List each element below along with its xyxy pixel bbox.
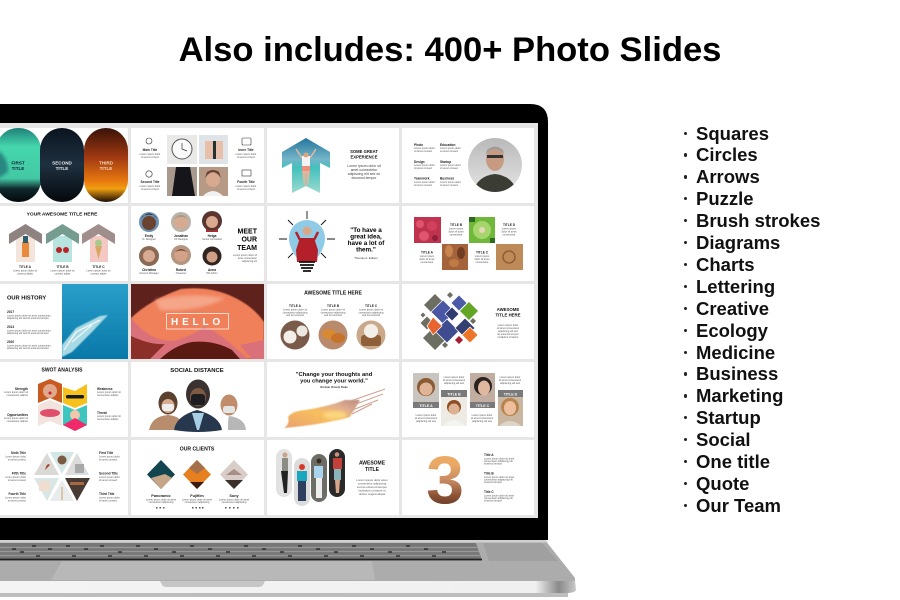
slide: four texture squares: consectetur [476,261,489,264]
slide: meet our team: Jonathan [174,234,188,238]
slide: four portraits: sit amet consectetur [443,379,465,382]
slide: swot analysis: consectetur adipisc [97,418,119,421]
slide: four texture squares: dolor sit amet [419,258,435,261]
slide: three circle photos: Lorem ipsum dolor sit [321,308,345,312]
slide: three circle photos: Lorem ipsum dolor sit [359,308,383,312]
slide: portrait with six topics: Education [440,143,455,147]
feature list [684,122,820,516]
feature list: Our Team [696,495,781,516]
slide: our clients: consectetur adipiscing [222,501,247,504]
slide: hexagon of triangles: Fourth Title [9,492,26,496]
slide: four texture squares: TITLE C [476,250,489,254]
slide: hexagon of triangles: sit amet consect [8,458,26,462]
slide: awesome title with people pills: AWESOME [359,460,386,466]
slide: diamond mosaic: TITLE HERE [495,312,521,318]
slide: number three: eiusmod tempor [484,462,502,466]
slide: idea quote with light bulb: have a lot of [348,240,385,247]
slide: swot analysis: Lorem ipsum dolor sit [97,391,121,394]
slide: three circle photos: consectetur adipiscing [359,312,384,314]
slide: some great experience: Lorem ipsum dolor sit [347,164,381,168]
slide: hello canyon photo: HELLO [171,317,224,328]
slide: hello canyon photo [131,284,264,359]
slide: four icons and photos: Lorem ipsum dolor [140,185,161,188]
slide: swot analysis: Weakness [97,387,113,391]
slide: swot analysis: consectetur adipisc [7,420,29,423]
slide: our history: 2017 [7,310,14,314]
slide: change your thoughts quote: "Change your thoughts and [296,372,373,378]
slide: our history: adipiscing elit sed do eiusmod tempor [7,347,49,350]
slide: four icons and photos: sit amet consect [237,156,255,159]
slide: four icons and photos: Second Title [141,180,160,184]
slide: four portraits: TITLE C [476,404,490,408]
slide: meet our team: TEAM [237,245,257,252]
slide: meet our team: Christina [142,268,156,272]
slide: hexagon of triangles: Lorem ipsum dolor [99,456,120,458]
laptop mockup with slide grid [0,104,576,597]
slide: portrait with six topics [402,128,534,203]
slide: four icons and photos [131,128,264,203]
slide: our clients: consectetur adipiscing [185,501,210,504]
slide: three circle photos: sed do eiusmod [286,314,304,317]
slide: three circle photos: AWESOME TITLE HERE [304,290,362,296]
trackpad [51,561,375,580]
slide: four icons and photos: Fourth Title [237,180,255,184]
slide: four texture squares: consectetur [503,234,516,236]
slide: meet our team: Emily [145,234,153,238]
feature list: Diagrams [696,232,780,253]
slide: some great experience: SOME GREAT [350,149,378,154]
slide: portrait with six topics: Lorem ipsum dolor [440,147,461,150]
slide: number three: Lorem ipsum dolor sit amet [484,458,514,460]
slide: four texture squares [402,206,534,281]
slide: idea quote with light bulb: "To have a [350,227,382,234]
slide: three circle photos: TITLE A [289,304,302,308]
slide: hexagon of triangles [0,440,128,515]
feature list: Business [696,363,778,384]
slide: swot analysis: consectetur adipisc [7,394,29,397]
slide: meet our team: adipiscing elit [242,260,257,263]
slide: awesome title with people pills: Lorem ipsum dolor amet [356,478,388,482]
slide: our clients: consectetur adipiscing [149,501,174,504]
slide: four texture squares: dolor sit amet [474,258,490,261]
slide: diamond mosaic: do eiusmod tempor [497,333,519,336]
slide: four portraits: Lorem ipsum dolor [472,414,493,417]
slide: hexagon of triangles: Fifth Title [12,472,26,476]
slide: portrait with six topics: Design [414,160,425,164]
slide: portrait with six topics: Startup [440,160,451,164]
slide: number three: consectetur adipiscing elit [484,460,513,463]
slide: awesome title with arrows: Lorem ipsum dolor sit [87,270,111,272]
slide: number three: eiusmod tempor [484,481,502,484]
slide: meet our team: Sr. Designer [142,238,156,241]
slide: diamond mosaic: Lorem ipsum dolor [498,324,519,327]
slide: four icons and photos: sit amet consect [141,188,159,191]
slide: awesome title with arrows: TITLE B [56,265,69,269]
feature list: Marketing [696,385,783,406]
slide: awesome title with people pills: TITLE [365,467,380,473]
slide: idea quote with light bulb: great idea, [350,234,382,240]
slide: three titles: TITLE [12,166,24,171]
feature list: Medicine [696,342,775,363]
slide: three titles: THIRD [99,160,114,166]
slide: three circle photos: consectetur adipiscing [283,312,308,314]
slide: portrait with six topics: sit amet consect [414,184,432,187]
slide: meet our team: Robert [176,268,187,272]
front notch [160,581,265,587]
slide: portrait with six topics: sit amet consect [414,167,432,170]
slide: awesome title with people pills: sed do eiusmod tempor [357,485,387,489]
slide: our history: adipiscing elit sed do eiusmod tempor [7,317,49,320]
slide: change your thoughts quote: you change your world." [300,378,368,384]
slide: some great experience: amet consectetur [351,168,378,172]
slide: four texture squares: TITLE D [503,223,516,227]
slide: four texture squares: consectetur [450,234,463,236]
slide: hexagon of triangles: Lorem ipsum dolor [5,456,26,458]
slide: four portraits: TITLE B [447,392,461,396]
slide: awesome title with arrows: consect adipis [17,272,34,276]
slide: hexagon of triangles: sit amet consect [99,500,117,502]
slide: four portraits: TITLE A [419,404,433,408]
slide: four texture squares: dolor sit amet [501,230,517,234]
slide: our history [0,284,128,359]
slide: portrait with six topics: Lorem ipsum dolor [440,181,461,184]
slide: our clients: Lorem ipsum dolor sit amet [182,498,212,502]
slide: four portraits: sit amet consectetur [471,417,493,420]
slide: three circle photos: TITLE B [327,304,340,308]
slide: four portraits: Lorem ipsum dolor [500,376,521,379]
title: Also includes: 400+ Photo Slides [179,31,721,69]
slide: social distance: SOCIAL DISTANCE [170,368,224,374]
slide: three circle photos: Lorem ipsum dolor sit [283,308,307,312]
slide: number three: Lorem ipsum dolor sit amet [484,476,514,479]
slide: portrait with six topics: Lorem ipsum dolor [440,164,461,167]
slide: four portraits: adipiscing elit sed [500,382,520,385]
slide: three titles: SECOND [52,160,73,166]
slide: awesome title with arrows [0,206,128,281]
slide: our history: adipiscing elit sed do eiusmod tempor [7,332,49,335]
slide: swot analysis: Lorem ipsum dolor sit [4,391,28,394]
slide: four texture squares: Lorem ipsum [420,255,434,258]
slide: our history: Lorem ipsum dolor sit amet consectetur [7,330,51,332]
feature list: Ecology [696,320,768,341]
slide: some great experience: eiusmod tempor [351,176,377,180]
slide: swot analysis [0,362,128,437]
slide: our clients: Lorem ipsum dolor sit amet [219,498,249,502]
slide: four portraits: adipiscing elit sed [472,420,492,423]
slide: three circle photos [267,284,399,359]
slide: meet our team: OUR [241,236,257,244]
slide: number three: consectetur adipiscing elit [484,478,513,482]
slide: awesome title with arrows: Lorem ipsum dolor sit [13,270,37,272]
slide: four icons and photos: Lorem ipsum dolor [236,153,257,156]
slide: hexagon of triangles: Lorem ipsum dolor [5,496,26,500]
slide: hexagon of triangles: Lorem ipsum dolor [99,476,120,479]
slide: meet our team: Senior Consultant [202,238,222,241]
slide: awesome title with people pills [267,440,399,515]
feature list: Social [696,429,750,450]
slide: four texture squares: dolor sit amet [448,230,464,234]
slide: three titles: TITLE [56,166,68,171]
slide: portrait with six topics: Photo [414,143,423,147]
speaker grille [483,543,558,561]
laptop lid bezel [0,104,548,540]
slide: diamond mosaic: sit amet consectetur [497,327,519,330]
slide: portrait with six topics: sit amet consect [440,150,458,153]
slide: number three: Title A [484,453,494,457]
slide: meet our team: HR Admin [206,272,218,275]
slide: portrait with six topics: Teamwork [414,176,430,180]
slide: number three: consectetur adipiscing elit [484,497,513,500]
slide: hexagon of triangles: sit amet consect [99,458,117,462]
slide: hexagon of triangles: Third Title [99,492,115,496]
slide: four texture squares: TITLE A [421,250,434,254]
slide: some great experience: adipiscing elit sed do [348,172,380,176]
slide: number three: 3 [426,442,464,518]
slide: awesome title with arrows: TITLE A [19,265,32,269]
slide: our clients: Fujifilm [190,494,204,498]
feature list: Puzzle [696,188,754,209]
slide: four icons and photos: Main Title [143,148,158,152]
slide: some great experience [267,128,399,203]
slide: four portraits: TITLE D [504,392,518,396]
slide: social distance [131,362,264,437]
slide: portrait with six topics: sit amet consect [414,150,432,153]
slide: three circle photos: sed do eiusmod [362,314,380,317]
feature list: One title [696,451,770,472]
slide: idea quote with light bulb: them." [356,246,376,254]
slide: swot analysis: Threat [97,411,108,415]
slide: portrait with six topics: sit amet consect [440,184,458,187]
slide: four icons and photos: Inner Title [238,148,254,152]
slide: four texture squares: Lorem ipsum [475,255,489,258]
feature list: Creative [696,298,769,319]
slide: three circle photos: TITLE C [365,304,378,308]
slide: meet our team [131,206,264,281]
slide: meet our team: Account Manager [139,272,159,275]
slide: our clients: Panoramic [151,494,171,498]
slide: meet our team: Anna [208,268,216,272]
laptop base [0,540,576,597]
slide: change your thoughts quote: Norman Vincent Peale [320,385,348,389]
slide: our clients: OUR CLIENTS [180,446,215,452]
slide: three titles [0,128,128,203]
slide: our history: 2020 [7,340,14,344]
slide: diamond mosaic [402,284,534,359]
slide: swot analysis: SWOT ANALYSIS [41,368,83,374]
slide: meet our team: amet consectetur [238,257,257,260]
slide: four portraits: adipiscing elit sed [444,382,464,385]
slide: hexagon of triangles: Sixth Title [11,451,26,455]
slide: four portraits: adipiscing elit sed [416,420,436,423]
slide: awesome title with arrows: Lorem ipsum dolor sit [51,270,75,272]
slide: hexagon of triangles: First Title [99,451,114,455]
slide: four icons and photos: Lorem ipsum dolor [236,185,257,188]
slide: four texture squares: consectetur [421,261,434,264]
slide: idea quote with light bulb [267,206,399,281]
slide: four portraits [402,362,534,437]
slide: our clients [131,440,264,515]
slide: swot analysis: Lorem ipsum dolor sit [97,415,121,418]
feature list: Squares [696,122,769,144]
slide: four icons and photos: Lorem ipsum dolor [140,153,161,156]
slide: three circle photos: sed do eiusmod [324,314,342,317]
slide: four portraits: sit amet consectetur [499,379,521,382]
slide: swot analysis: Opportunities [7,413,28,417]
slide: four texture squares: Lorem ipsum [502,228,516,230]
slide: number three: Title B [484,472,494,476]
slide: number three: eiusmod tempor [484,500,502,502]
slide: change your thoughts quote [267,362,399,437]
slide: swot analysis: Strength [15,387,28,391]
slide: hexagon of triangles: sit amet consect [99,479,117,482]
feature list: Lettering [696,276,775,297]
slide: our history: Lorem ipsum dolor sit amet consectetur [7,344,51,348]
slide: hexagon of triangles: sit amet consect [8,479,26,482]
slide: four portraits: Lorem ipsum dolor [416,414,437,417]
slide: hexagon of triangles: Second Title [99,472,118,476]
feature list: Brush strokes [696,210,820,231]
feature list: Startup [696,407,761,428]
slide: meet our team: Treasurer [176,272,187,275]
feature list: Charts [696,254,755,275]
slide: four portraits: sit amet consectetur [415,417,437,420]
slide: our history: 2013 [7,325,14,329]
slide: four icons and photos: sit amet consect [237,188,255,191]
slide: four texture squares: Lorem ipsum [449,228,463,230]
slide: number three: Lorem ipsum dolor sit amet [484,494,514,498]
slide: swot analysis: consectetur adipisc [97,394,119,397]
slide: awesome title with people pills: incididunt ut labore et [358,488,386,492]
slide: our clients: Lorem ipsum dolor sit amet [146,498,176,502]
slide: portrait with six topics: Lorem ipsum dolor [414,164,435,167]
slide: meet our team: Helga [208,234,217,238]
slide: three circle photos: consectetur adipiscing [321,312,346,314]
slide: some great experience: EXPERIENCE [350,154,378,160]
slide: portrait with six topics: sit amet consect [440,167,458,170]
slide: three titles: TITLE [100,166,112,171]
slide: three titles: FIRST [11,160,25,166]
slide: number three: Title C [484,490,494,494]
slide: idea quote with light bulb: Thomas A. Edison [354,256,378,260]
slide: meet our team: Lorem ipsum dolor sit [233,254,257,257]
slide: awesome title with arrows: YOUR AWESOME TITLE HERE [27,212,98,218]
slide: four texture squares: TITLE B [450,223,463,227]
slide: portrait with six topics: Lorem ipsum dolor [414,181,435,184]
slide: diamond mosaic: adipiscing elit sed [498,330,518,333]
slide: diamond mosaic: incididunt ut labore [498,336,519,339]
slide: awesome title with people pills: dolore magna aliqua [359,492,385,496]
feature list: Quote [696,473,749,494]
slide: portrait with six topics: Business [440,176,454,180]
slide: awesome title with people pills: consectetur adipiscing [358,482,387,486]
slide: awesome title with arrows: TITLE C [92,265,105,269]
feature list: Circles [696,144,758,165]
slide: hexagon of triangles: sit amet consect [8,500,26,502]
slide: number three [402,440,534,518]
slide: meet our team: MEET [238,228,258,236]
slide: awesome title with arrows: consect adipis [91,272,107,276]
slide: our clients: Sony [229,494,240,498]
slide: portrait with six topics: Lorem ipsum dolor [414,147,435,150]
slide: awesome title with arrows: consect adipis [55,272,71,276]
slide: swot analysis: Lorem ipsum dolor sit [4,417,28,420]
slide: our history: Lorem ipsum dolor sit amet consectetur [7,314,51,318]
slide: our history: OUR HISTORY [7,296,46,302]
slide: four portraits: Lorem ipsum dolor [444,376,465,379]
slide: hexagon of triangles: Lorem ipsum dolor [99,496,120,500]
screen background [0,123,538,518]
keyboard [0,543,482,560]
slide: diamond mosaic: AWESOME [497,307,519,312]
feature list: Arrows [696,166,760,187]
slide: meet our team: UX Designer [174,238,188,241]
slide: hexagon of triangles: Lorem ipsum dolor [5,476,26,479]
slide: four icons and photos: sit amet consect [141,156,159,159]
